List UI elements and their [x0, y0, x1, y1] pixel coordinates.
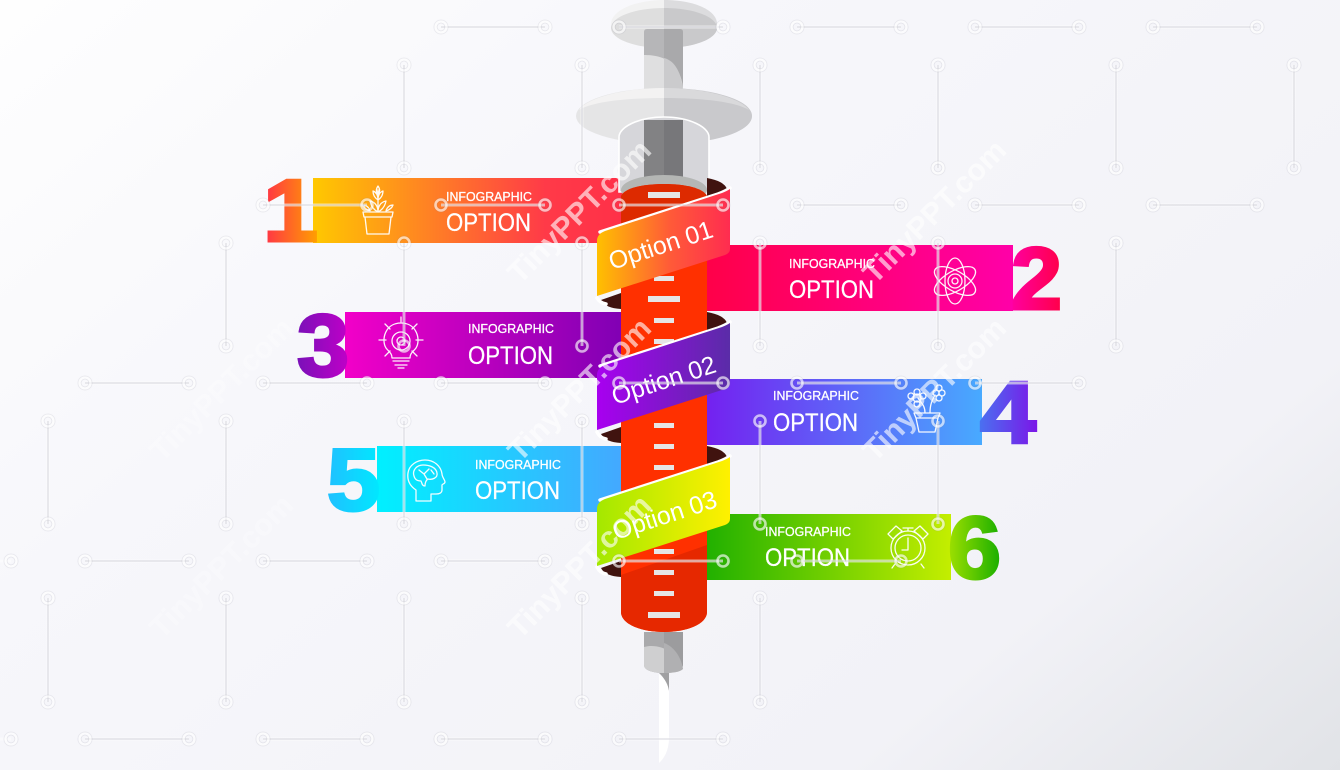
icon: light bulb with gear	[379, 317, 423, 368]
barrel liquid	[621, 184, 707, 632]
label 1: OPTION	[446, 209, 531, 237]
watermarks: TinyPPT.com	[857, 312, 1013, 468]
ribbon 1	[597, 188, 730, 309]
ribbon 3 text: Option 03	[609, 486, 721, 546]
bar 2	[705, 229, 1062, 328]
ribbon 2 text: Option 02	[608, 351, 720, 411]
watermarks: TinyPPT.com	[502, 312, 658, 468]
ribbon 1 text: Option 01	[605, 216, 717, 276]
label 4: OPTION	[773, 409, 858, 437]
barrel glass	[619, 117, 709, 205]
plunger flange	[576, 88, 752, 144]
icon: potted plant	[363, 186, 393, 234]
bar 3	[297, 296, 623, 395]
watermarks: TinyPPT.com	[857, 134, 1013, 290]
syringe hub	[644, 632, 683, 673]
label 2	[789, 256, 875, 304]
label 1: INFOGRAPHIC	[446, 189, 532, 204]
label 5: INFOGRAPHIC	[475, 457, 561, 472]
watermarks: TinyPPT.com	[144, 489, 300, 645]
label 6: INFOGRAPHIC	[765, 524, 851, 539]
label 2: OPTION	[789, 276, 874, 304]
syringe	[576, 0, 752, 763]
plunger head	[611, 0, 717, 48]
watermarks: TinyPPT.com	[502, 489, 658, 645]
label 3: OPTION	[468, 342, 553, 370]
ribbon 3	[597, 456, 730, 577]
watermarks	[144, 134, 1013, 645]
needle	[659, 673, 669, 763]
label 4	[773, 388, 859, 437]
label 1	[446, 189, 532, 237]
icon: flower pot	[908, 385, 945, 432]
number 4: 4	[980, 363, 1036, 462]
bar 4	[705, 363, 1036, 462]
icon: atom	[930, 258, 980, 304]
icon: brain head	[408, 460, 445, 501]
label 6: OPTION	[765, 544, 850, 572]
watermarks: TinyPPT.com	[144, 312, 300, 468]
label 4: INFOGRAPHIC	[773, 388, 859, 403]
number 5: 5	[327, 430, 380, 529]
label 5: OPTION	[475, 477, 560, 505]
bar 6	[705, 498, 1001, 597]
ribbon 2	[597, 322, 730, 443]
bar 1	[263, 161, 623, 260]
number 2: 2	[1011, 229, 1062, 328]
watermarks: TinyPPT.com	[502, 134, 658, 290]
number 1: 1	[263, 161, 318, 260]
plunger stem	[644, 29, 683, 90]
label 2: INFOGRAPHIC	[789, 256, 875, 271]
label 5	[475, 457, 561, 505]
icon: alarm clock	[888, 526, 928, 568]
label 3: INFOGRAPHIC	[468, 321, 554, 336]
label 6	[765, 524, 851, 572]
number 3: 3	[297, 296, 349, 395]
label 3	[468, 321, 554, 370]
back of ribbons: dark interior	[707, 178, 727, 465]
barrel tick marks	[648, 192, 680, 618]
number 6: 6	[948, 498, 1001, 597]
bar 5	[327, 430, 623, 529]
